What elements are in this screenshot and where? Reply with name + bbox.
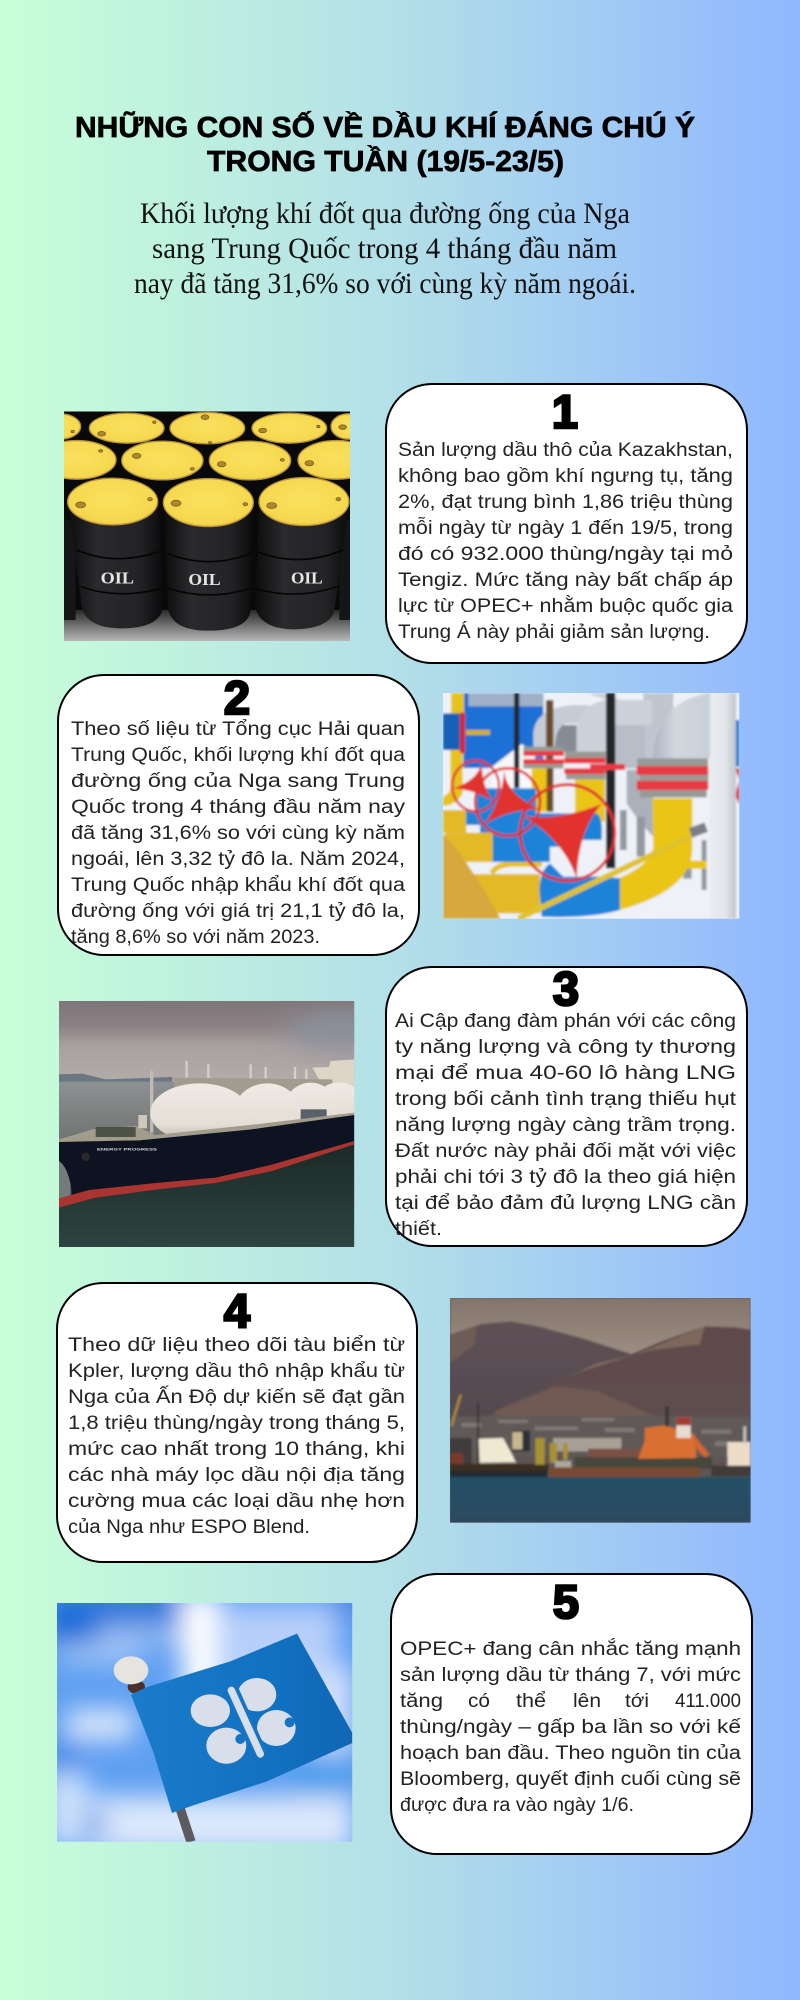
text block 3: phải chi tới 3 tỷ đô la theo giá hiện	[395, 1167, 736, 1188]
yellow risers	[532, 768, 707, 910]
text block 3: Đất nước này phải đối mặt với việc	[395, 1141, 736, 1162]
text block 5: được đưa ra vào ngày 1/6.	[400, 1795, 634, 1816]
text block 2: đường ống của Nga sang Trung	[71, 771, 405, 792]
panel 3	[386, 962, 747, 1246]
hull	[59, 1115, 354, 1195]
card 2 background	[58, 675, 419, 955]
OIL labels: OIL	[188, 570, 221, 589]
text block 2: tăng 8,6% so với năm 2023.	[71, 927, 320, 948]
panel 5	[391, 1574, 752, 1854]
text block 2: đường ống với giá trị 21,1 tỷ đô la,	[71, 901, 405, 922]
ship name: ENERGY PROGRESS	[97, 1147, 157, 1152]
subtitle	[134, 197, 636, 300]
text block 4: của Nga như ESPO Blend.	[68, 1517, 310, 1538]
text block 3: trong bối cảnh tình trạng thiếu hụt	[395, 1089, 737, 1110]
number 4: 4	[224, 1284, 250, 1337]
text block 4: các nhà máy lọc dầu nội địa tăng	[68, 1465, 405, 1486]
title: TRONG TUẦN (19/5-23/5)	[207, 144, 564, 178]
text block 1: Sản lượng dầu thô của Kazakhstan,	[398, 440, 733, 461]
text block 1: lực từ OPEC+ nhằm buộc quốc gia	[398, 595, 733, 617]
hillside town	[450, 1416, 751, 1456]
OPEC logo	[191, 1678, 296, 1764]
text block 5	[400, 1638, 741, 1816]
cargo domes	[150, 1082, 363, 1142]
bottom-left yellow pipes	[443, 810, 540, 913]
card 1 background	[386, 384, 747, 663]
white column	[710, 693, 736, 919]
text block 4: 1,8 triệu thùng/ngày trong tháng 5,	[68, 1413, 405, 1434]
panel 1	[386, 384, 747, 663]
text block 1	[398, 440, 733, 643]
text block 5: có	[468, 1691, 490, 1712]
right ship	[727, 1442, 751, 1466]
flanges	[523, 747, 708, 797]
text block 2: Trung Quốc, khối lượng khí đốt qua	[71, 745, 405, 766]
number 3: 3	[553, 962, 579, 1015]
text block 5: Bloomberg, quyết định cuối cùng sẽ	[400, 1769, 741, 1790]
white ship	[479, 1438, 516, 1463]
text block 5: OPEC+ đang cân nhắc tăng mạnh	[400, 1638, 741, 1660]
text block 2: Quốc trong 4 tháng đầu năm nay	[71, 797, 406, 818]
OIL labels: OIL	[101, 568, 134, 587]
text block 4: Kpler, lượng dầu thô nhập khẩu từ	[68, 1361, 405, 1382]
card 5 background	[391, 1574, 752, 1854]
tanker hull	[575, 1457, 712, 1468]
image: oil barrels	[64, 412, 350, 641]
text block 2: đã tăng 31,6% so với cùng kỳ năm	[71, 823, 405, 844]
subtitle: nay đã tăng 31,6% so với cùng kỳ năm ngoái.	[134, 267, 636, 300]
card 4 background	[57, 1283, 417, 1562]
text block 4: mức cao nhất trong 10 tháng, khi	[68, 1439, 405, 1460]
blue valve bodies	[466, 788, 620, 917]
image: OPEC flag	[57, 1603, 352, 1842]
text block 3: Ai Cập đang đàm phán với các công	[395, 1011, 736, 1032]
flag	[131, 1634, 352, 1813]
text block 4: cường mua các loại dầu nhẹ hơn	[68, 1491, 405, 1512]
subtitle: sang Trung Quốc trong 4 tháng đầu năm	[152, 232, 617, 265]
text block 5: lên	[573, 1691, 601, 1712]
left yellow pipe and fitting	[451, 693, 464, 715]
OIL labels: OIL	[291, 568, 323, 587]
image: LNG tanker	[59, 1001, 354, 1247]
number 5: 5	[553, 1575, 579, 1628]
image: gas pipeline valves	[443, 693, 740, 919]
text block 3	[395, 1011, 737, 1240]
text block 5: thể	[516, 1691, 546, 1712]
text block 1: không bao gồm khí ngưng tụ, tăng	[398, 466, 733, 487]
panel 2	[58, 671, 419, 955]
text block 2: Trung Quốc nhập khẩu khí đốt qua	[71, 875, 405, 896]
text block 4	[68, 1335, 405, 1538]
title: NHỮNG CON SỐ VỀ DẦU KHÍ ĐÁNG CHÚ Ý	[75, 110, 695, 144]
number 2: 2	[224, 671, 250, 724]
grey pipes	[643, 693, 673, 760]
text block 4: Theo dữ liệu theo dõi tàu biển từ	[68, 1335, 405, 1356]
text block 3: mại để mua 40-60 lô hàng LNG	[395, 1063, 736, 1084]
text block 1: Trung Á này phải giảm sản lượng.	[398, 622, 710, 643]
text block 5: hoạch ban đầu. Theo nguồn tin của	[400, 1743, 741, 1764]
panel 4	[57, 1283, 417, 1562]
text block 1: đó có 932.000 thùng/ngày tại mỏ	[398, 544, 733, 565]
text block 5: tăng	[400, 1691, 443, 1712]
text block 4: Nga của Ấn Độ dự kiến sẽ đạt gần	[68, 1386, 405, 1408]
text block 5: thùng/ngày – gấp ba lần so với kế	[400, 1717, 741, 1738]
number 1: 1	[552, 385, 578, 438]
text block 5: sản lượng dầu từ tháng 7, với mức	[400, 1665, 741, 1686]
text block 2	[71, 719, 406, 948]
OIL labels	[101, 568, 323, 589]
sea	[450, 1477, 751, 1523]
text block 2: ngoái, lên 3,32 tỷ đô la. Năm 2024,	[71, 849, 405, 870]
title	[75, 110, 695, 178]
text block 3: năng lượng ngày càng trầm trọng.	[395, 1115, 736, 1136]
red valve wheels	[452, 761, 615, 881]
text block 1: 2%, đạt trung bình 1,86 triệu thùng	[398, 492, 733, 513]
text block 1: Tengiz. Mức tăng này bất chấp áp	[398, 570, 733, 591]
text block 5: 411.000	[675, 1691, 741, 1712]
text block 1: mỗi ngày từ ngày 1 đến 19/5, trong	[398, 517, 733, 539]
superstructure	[312, 1059, 354, 1089]
orange superstructure	[638, 1425, 696, 1459]
image: oil port with mountains	[450, 1298, 751, 1523]
text block 3: tại để bảo đảm đủ lượng LNG cần	[395, 1193, 736, 1214]
text block 3: ty năng lượng và công ty thương	[395, 1037, 736, 1058]
subtitle: Khối lượng khí đốt qua đường ống của Nga	[140, 197, 630, 230]
card 3 background	[386, 967, 747, 1246]
text block 3: thiết.	[395, 1219, 442, 1240]
front barrel bodies	[68, 502, 349, 631]
text block 2: Theo số liệu từ Tổng cục Hải quan	[71, 719, 405, 740]
text block 5: tới	[625, 1691, 649, 1712]
